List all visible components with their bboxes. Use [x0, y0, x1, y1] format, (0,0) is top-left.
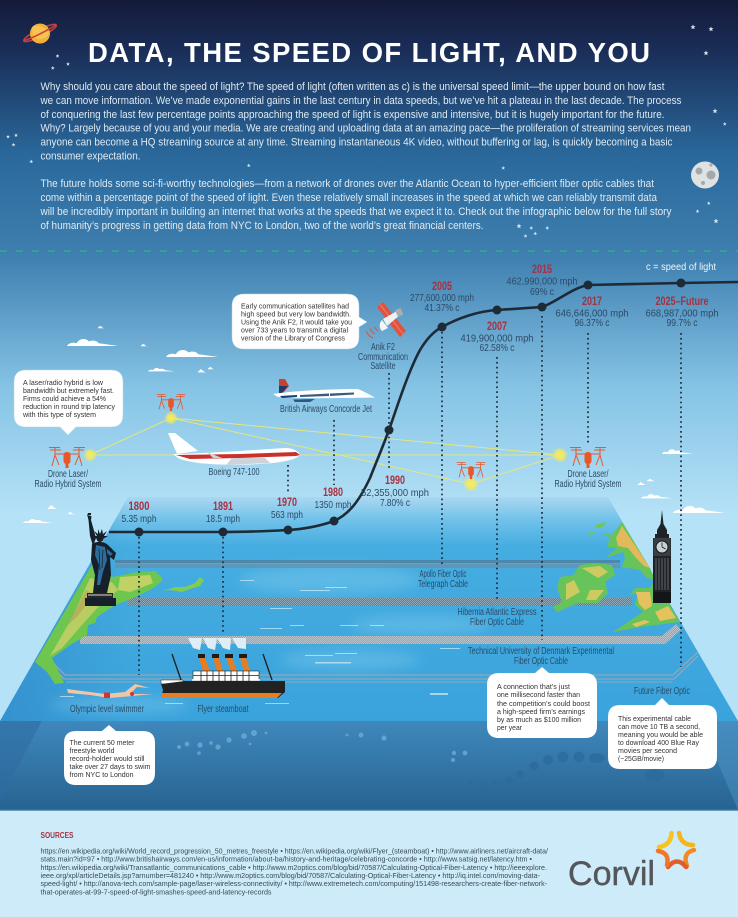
callout: swimmer: The current 50 meter [70, 738, 135, 747]
label: Hibernia cable: Hibernia Atlantic Express [458, 607, 536, 618]
text block: sources: that-operates-at-99-7-speed-of-light-smashes-speed-and-latency-records [40, 887, 272, 896]
icon: Concorde [273, 379, 375, 402]
data label: 1970: 563 mph [271, 509, 303, 521]
text block: introduction first paragraph: Why should you care about the speed of light? The speed of light (often written as c) is the universal speed limit—the upper bound on how fast [40, 81, 665, 93]
panel: deep water band [0, 721, 738, 810]
text block: sources [40, 846, 548, 896]
callout: laser radio hybrid: A laser/radio hybrid is low [23, 378, 103, 387]
icon: ringed planet [22, 22, 58, 44]
data label: 2025 to future [646, 296, 719, 329]
text block: introduction second paragraph [40, 178, 672, 232]
callout: experimental cable: (~25GB/movie) [618, 754, 664, 763]
data label: 2007: 419,900,000 mph [460, 332, 534, 344]
label: Technical University cable: Technical University of Denmark Experimental [468, 646, 614, 657]
callout: millisecond latency: a high-speed firm’s earnings [497, 707, 585, 716]
laser links between drones [90, 418, 560, 484]
icon: moon [691, 162, 719, 188]
icon: Big Ben [653, 510, 671, 603]
data label: 1970 [271, 497, 303, 521]
data label: 2015 [506, 264, 578, 298]
label: Apollo cable: Apollo Fiber Optic [420, 569, 466, 580]
data label: 2017: 2017 [582, 296, 602, 308]
land: Great Britain [590, 522, 680, 632]
data label: 2015: 2015 [532, 264, 552, 276]
labels: cables [418, 569, 690, 697]
callout: experimental cable: movies per second [618, 746, 677, 755]
callout: millisecond latency: per year [497, 723, 522, 732]
icon: drone left [49, 448, 85, 468]
data label: 1891: 1891 [213, 501, 233, 513]
label: swimmer: Olympic level swimmer [70, 704, 144, 715]
panel: clouds [23, 326, 725, 523]
footer background [0, 810, 738, 917]
label: satellite [358, 342, 408, 372]
text block: introduction second paragraph: will be incredibly important in building an internet that works at the speeds that we expect it to. Check out the infographic below for the full story [40, 206, 672, 218]
data label: 1980: 1350 mph [314, 499, 352, 511]
data label: 2017 [556, 296, 629, 329]
callout: experimental cable: to download 400 Blue Ray [618, 738, 699, 747]
land: Ireland [553, 563, 615, 612]
callout: experimental cable: can move 10 TB a second, [618, 722, 700, 731]
data label: 2017: 96.37% c [574, 317, 610, 329]
data label: 2007: 2007 [487, 321, 507, 333]
data label: 2017: 646,646,000 mph [556, 308, 629, 320]
label: c equals speed of light: c = speed of light [646, 261, 716, 273]
label: Future Fiber Optic: Future Fiber Optic [634, 686, 690, 697]
data label: 2007 [460, 321, 534, 354]
ocean light patches [50, 566, 490, 713]
label: drone left: Radio Hybrid System [34, 479, 102, 490]
icon: drone middle [457, 463, 485, 479]
callout: millisecond latency: by as much as $100 million [497, 715, 581, 724]
dotted drop lines [139, 316, 681, 675]
cable: Future Fiber Optic [50, 652, 698, 682]
data label: 1980 [314, 487, 352, 511]
label: satellite: Anik F2 [371, 342, 395, 353]
callout: satellite: high speed but very low bandwidth. [241, 310, 351, 318]
text block: introduction first paragraph: consumer expectation. [40, 150, 140, 162]
text block: sources: https://en.wikipedia.org/wiki/Transatlantic_communications_cable • http://www.m2optics.com/blog/bid/70587/Calculating-Optical-Fiber-Latency • http://ieeexplore. [40, 863, 547, 872]
text block: sources: speed-light/ • http://anova-tech.com/sample-page/laser-wireless-connectivity/ • http://www.extremetech.com/computing/151498-researchers-create-fiber-network- [40, 879, 548, 888]
label: Hibernia cable: Fiber Optic Cable [470, 617, 524, 628]
title: DATA, THE SPEED OF LIGHT, AND YOU [88, 37, 650, 68]
panel: perspective ocean map [0, 497, 738, 721]
data label: 2007: 62.58% c [480, 342, 514, 354]
text block: sources: https://en.wikipedia.org/wiki/World_record_progression_50_metres_freestyle • https://en.wikipedia.org/wiki/Flyer_(steamboat) • http://www.airliners.net/aircraft-data/ [40, 846, 548, 856]
callout: laser radio hybrid: bandwidth but extremely fast. [23, 386, 114, 395]
label: drone right: Drone Laser/ [568, 469, 609, 480]
ocean sparkle [60, 580, 460, 704]
callout: swimmer: from NYC to London [70, 770, 134, 779]
label: drone right [554, 469, 622, 490]
callout: laser radio hybrid: Firms could achieve a 54% [23, 394, 106, 403]
callout: experimental cable: This experimental cable [618, 714, 691, 723]
icon: Anik F2 satellite [366, 302, 406, 338]
data label: 2015: 69% c [530, 286, 554, 298]
data label: 2005: 277,600,000 mph [410, 292, 474, 304]
logo: Corvil: Corvil [568, 855, 655, 893]
label: drone left: Drone Laser/ [48, 469, 88, 480]
label: satellite: Communication [358, 352, 408, 363]
text block: sources: stats.main?id=97 • http://www.britishairways.com/en-us/information/about-ba/history-and-heritage/celebrating-concorde • http://www.satsig.net/latency.htm • [40, 855, 532, 864]
data label: 1800 [122, 501, 157, 525]
data label: 2025 to future: 2025–Future [656, 296, 708, 308]
text block: introduction first paragraph: of conquering the last few percentage points approaching the speed of light is expensive and intensive, but it is hugely important for the future. [40, 109, 664, 121]
text block: introduction first paragraph [40, 81, 691, 162]
label: steamboat: Flyer steamboat [198, 704, 249, 715]
data label: 2005 [410, 281, 474, 314]
icon: swimmer [67, 684, 153, 698]
text block: introduction second paragraph: of humanity’s progress in getting data from NYC to London, two of the world’s great financial centers. [40, 220, 484, 232]
callout: swimmer [64, 725, 155, 785]
label: Technical University cable [468, 646, 614, 667]
callout: laser radio hybrid [14, 370, 123, 435]
callout: satellite: Using the Anik F2, it would take you [241, 318, 352, 326]
label: Apollo cable: Telegraph Cable [418, 579, 468, 590]
label: satellite: Satellite [370, 361, 396, 372]
cable: Technical University of Denmark [80, 624, 681, 644]
label: drone left [34, 469, 102, 490]
icon: drone right [570, 448, 606, 468]
icon: Boeing 747 [168, 433, 300, 465]
data label: 2025 to future: 99.7% c [666, 317, 698, 329]
callout: millisecond latency [487, 667, 597, 738]
callout: satellite: version of the Library of Congress [241, 334, 345, 342]
panel: stars [6, 24, 727, 238]
label: drone right: Radio Hybrid System [554, 479, 622, 490]
data label: 2005: 2005 [432, 281, 452, 293]
data label: 1990: 7.80% c [380, 497, 410, 509]
data label: 2015: 462,990,000 mph [506, 276, 578, 288]
text block: sources: ieee.org/xpl/articleDetails.jsp?arnumber=481240 • http://www.m2optics.com/blog/bid/70587/Calculating-Optical-Fiber-Latency • http://iq.intel.com/moving-data- [40, 871, 541, 880]
callout: millisecond latency: A connection that’s just [497, 682, 571, 691]
text block: introduction second paragraph: come within a percentage point of the speed of light. Even these relatively small increases in the speed at which we can reliably transmit data [40, 192, 658, 204]
callout: laser radio hybrid: reduction in round trip latency [23, 402, 115, 411]
callout: experimental cable: meaning you would be able [618, 730, 703, 739]
data label: 1800: 1800 [128, 501, 150, 513]
callout: swimmer: freestyle world [70, 746, 114, 755]
label: Boeing: Boeing 747-100 [208, 467, 260, 478]
callout: laser radio hybrid: with this type of system [22, 410, 96, 419]
label: Concorde: British Airways Concorde Jet [280, 404, 372, 415]
data label: 1990: 1990 [385, 475, 405, 487]
callout: satellite [232, 294, 367, 349]
data label: 1800: 5.35 mph [122, 513, 157, 525]
icon: Statue of Liberty [85, 513, 116, 606]
data label: 1891: 18.5 mph [206, 513, 240, 525]
icon: laser glow points [83, 411, 568, 492]
callout: experimental cable [608, 698, 717, 769]
callout: swimmer: take over 27 days to swim [70, 762, 150, 771]
data label: 1990 [361, 475, 429, 509]
label: Hibernia cable [458, 607, 536, 628]
data label: 2005: 41.37% c [424, 302, 460, 314]
callout: swimmer: record-holder would still [70, 754, 145, 763]
callout: satellite: over 733 years to transmit a digital [241, 326, 348, 334]
callout: satellite: Early communication satellites had [241, 302, 349, 310]
logo: Corvil [568, 833, 694, 893]
cable: Apollo [115, 560, 620, 568]
heading: sources: SOURCES [40, 831, 74, 840]
data label: 1990: 52,355,000 mph [361, 487, 429, 499]
text block: introduction second paragraph: The future holds some sci-fi-worthy technologies—from a network of drones over the Atlantic Ocean to hyper-efficient fiber optic cables that [40, 178, 655, 190]
label: Apollo cable [418, 569, 468, 590]
callout: millisecond latency: the competition’s could boost [497, 699, 591, 708]
cable: Hibernia [128, 598, 632, 606]
data label: 1970: 1970 [277, 497, 297, 509]
data label: 2025 to future: 668,987,000 mph [646, 308, 719, 320]
chart: speed curve [109, 278, 738, 536]
land: North America [35, 565, 204, 684]
label: Technical University cable: Fiber Optic Cable [514, 656, 568, 667]
icon: Flyer steamboat [161, 638, 285, 698]
icon: drone upper [157, 395, 185, 411]
icon: Corvil star [658, 833, 694, 867]
data label: 1980: 1980 [323, 487, 343, 499]
data label: 1891 [206, 501, 240, 525]
callout: millisecond latency: one millisecond faster than [497, 690, 580, 699]
